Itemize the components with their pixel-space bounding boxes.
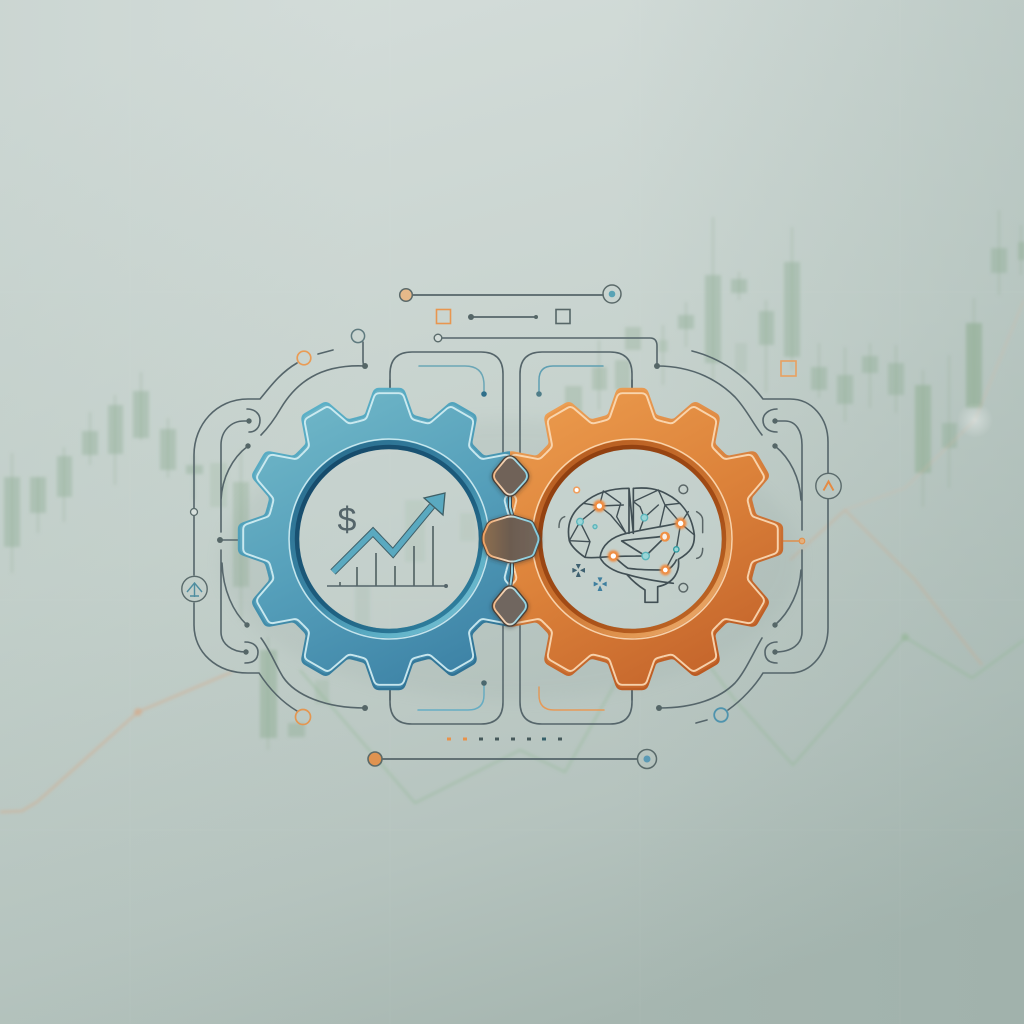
short dashes: [318, 350, 707, 723]
background glow right: [957, 402, 993, 438]
soft gear shadow: [220, 420, 800, 700]
orange stub right of gear: [783, 540, 802, 542]
orange gear highlight: [511, 392, 779, 686]
orange gear outer bevel: [536, 442, 728, 636]
chart axis: [327, 584, 448, 588]
rising arrow: [333, 493, 445, 572]
left inner circuit: [220, 421, 249, 652]
left outer circuit: [194, 363, 297, 711]
connector links: [510, 494, 513, 588]
green trend line: [300, 637, 1024, 803]
left bottom arc: [261, 638, 365, 708]
brain sparkle icons: [573, 564, 606, 591]
orange trace bottom right: [539, 687, 604, 710]
left candle wicks: [12, 372, 268, 750]
blue gear edge: [238, 388, 510, 690]
gray square marker: [556, 310, 570, 324]
left top arc: [261, 342, 365, 435]
orange gear inner bevel: [540, 447, 724, 631]
box outline left: [390, 352, 503, 724]
blue gear outer bevel: [292, 442, 486, 636]
top right target centre: [609, 291, 615, 297]
blue ring lower right: [714, 708, 728, 722]
circuit nodes: [217, 314, 778, 711]
chart bars: [340, 526, 433, 586]
orange ring lower left: [296, 710, 310, 724]
right small hooks: [763, 409, 777, 663]
orange gear edge: [510, 388, 784, 690]
orange trend line far right: [845, 300, 1024, 510]
circuit lines: [194, 295, 828, 759]
hollow node left rail: [190, 508, 198, 516]
connector centre hexagon: [484, 516, 538, 562]
connector top diamond: [494, 458, 527, 494]
coloured inner traces: [418, 366, 802, 710]
bottom connector line: [382, 758, 637, 760]
blue gear highlight: [242, 392, 510, 686]
blue gear body: [240, 390, 510, 688]
left candle bodies: [4, 391, 476, 738]
right top arc: [657, 366, 762, 435]
connector bottom diamond: [494, 588, 526, 624]
orange square marker: [436, 310, 450, 324]
left small hooks: [245, 409, 260, 663]
right bottom arc: [659, 638, 762, 708]
blue gear inner bevel: [297, 447, 481, 631]
blue gear: [238, 388, 510, 690]
hollow node top left: [351, 329, 365, 343]
brain neural mesh: [569, 490, 694, 570]
orange trend line right: [790, 510, 982, 665]
blue gear rim highlight: [289, 439, 489, 639]
brain glow nodes: [573, 486, 686, 575]
teal trace top left: [419, 366, 484, 394]
icon: financial growth chart: [327, 493, 448, 588]
icon: right circle chevron badge: [816, 473, 841, 499]
icon: left circle arrow badge: [182, 576, 207, 602]
teal trace top right: [539, 366, 603, 394]
orange gear lens: [542, 450, 722, 628]
right outer circuit: [692, 351, 828, 710]
icon: AI brain: [559, 485, 703, 602]
orange trend line left: [0, 672, 232, 812]
teal trace bottom left: [418, 683, 484, 710]
dollar sign: $: [338, 501, 357, 539]
background trend lines: [0, 300, 1024, 812]
middle connector line: [471, 316, 536, 318]
orange node right rail: [799, 538, 805, 544]
right candle bodies: [565, 242, 1024, 473]
orange gear rim highlight: [532, 439, 732, 639]
top right target node: [603, 285, 621, 303]
gear stems: [390, 380, 632, 700]
hollow and accent markers: [190, 285, 805, 768]
top connector line: [412, 294, 603, 296]
orange gear: [510, 388, 784, 690]
blue gear lens: [300, 450, 478, 628]
bottom right target node: [638, 750, 656, 768]
bottom dash row: [447, 738, 562, 740]
orange ring upper left: [297, 351, 311, 365]
orange square right: [781, 361, 796, 376]
bottom right target centre: [644, 756, 650, 762]
right candle wicks: [599, 210, 1021, 507]
hollow node upper connector: [434, 334, 442, 342]
central gear connector: [484, 458, 538, 624]
right inner circuit: [775, 421, 802, 652]
brain teal nodes: [577, 514, 679, 560]
background candlestick chart: [4, 210, 1024, 750]
upper long connector: [442, 338, 657, 366]
orange gear body: [510, 390, 781, 688]
bottom left orange node: [368, 752, 382, 766]
brain side rings: [559, 485, 703, 592]
brain outline: [568, 488, 694, 602]
box outline right: [520, 352, 632, 724]
top left orange node: [400, 289, 412, 301]
